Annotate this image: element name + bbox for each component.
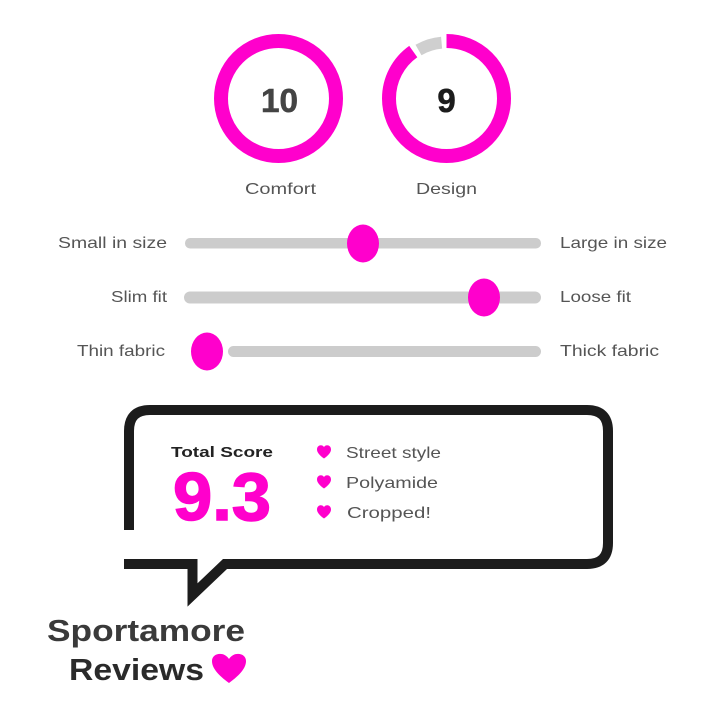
label: thin fabric: Thin fabric [77,343,165,360]
heading: total score: Total Score [171,444,273,461]
track [228,346,541,357]
feature list [317,445,441,522]
brand: sportamore reviews [47,613,246,687]
thumb [347,224,379,262]
speech bubble [124,410,608,595]
gauge remainder [418,43,442,50]
slider: size [58,224,667,262]
icon: heart [317,505,331,518]
icon: large heart [212,654,246,683]
score: comfort 10: 10 [261,82,298,119]
label: design: Design [416,181,477,198]
slider: fabric [77,332,659,370]
value: 9.3: 9.3 [173,459,271,535]
brand line one: Sportamore [47,613,245,648]
label: loose fit: Loose fit [560,289,632,306]
icon: heart [317,445,331,458]
label: thick fabric: Thick fabric [560,343,659,360]
score: design 9: 9 [437,82,456,119]
thumb [191,332,223,370]
brand line two: Reviews [69,652,204,687]
feature: polyamide: Polyamide [346,475,438,492]
feature: cropped: Cropped! [347,505,431,522]
gauge: design [389,41,504,156]
label: large in size: Large in size [560,235,667,252]
feature: street style: Street style [346,445,441,462]
label: slim fit: Slim fit [111,289,168,306]
thumb [468,278,500,316]
gauge: comfort [221,41,336,156]
label: small in size: Small in size [58,235,167,252]
track [185,238,541,248]
track [184,292,541,304]
icon: heart [317,475,331,488]
total score [171,444,273,535]
slider: fit [111,278,632,316]
label: comfort: Comfort [245,181,317,198]
